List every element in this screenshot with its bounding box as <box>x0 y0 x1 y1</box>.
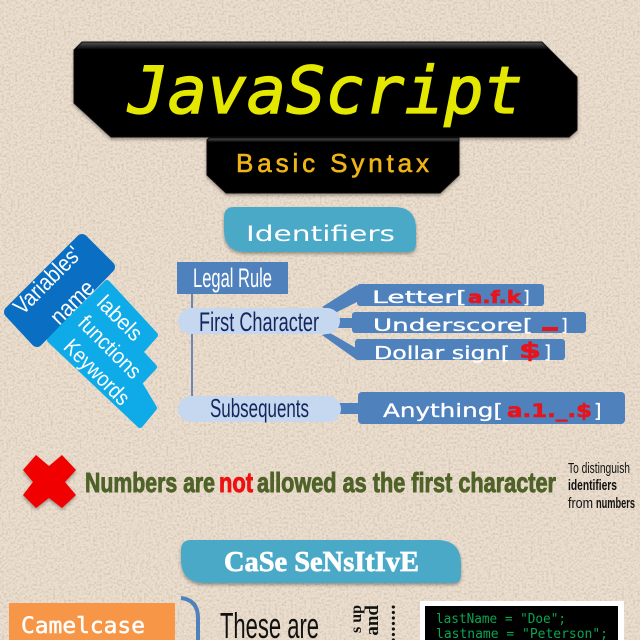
rule: Letter: Letter[ <box>372 288 467 308</box>
rotated text fragments: and <box>362 605 383 636</box>
rule: Letter: ] <box>523 288 530 308</box>
ribbon: Variables' name <box>8 240 109 341</box>
rule: Anything: ] <box>594 400 601 422</box>
code box <box>420 601 624 640</box>
heading: Identifiers: Identifiers <box>246 222 395 246</box>
ribbon: labels, functions, Keywords <box>50 283 155 425</box>
box: Legal Rule <box>177 262 288 294</box>
box: Legal Rule: Legal Rule <box>193 263 272 293</box>
subtitle banner: Basic Syntax <box>207 138 459 193</box>
label: labels: labels <box>92 290 148 346</box>
warning text: numbers not allowed <box>85 467 556 498</box>
connector from Subsequents <box>338 403 359 414</box>
rule: Underscore: Underscore[ <box>373 316 533 336</box>
warning text: numbers not allowed: Numbers are <box>85 467 215 498</box>
side note: to distinguish identifiers from numbers: identifiers <box>568 477 617 494</box>
warning text: numbers not allowed: allowed as the first character <box>257 467 556 498</box>
label: Keywords: Keywords <box>59 334 135 410</box>
code line 1: lastName = "Doe"; <box>436 612 566 627</box>
side note: to distinguish identifiers from numbers: from <box>568 495 593 512</box>
title banner: JavaScript <box>74 42 577 137</box>
subtitle banner: Basic Syntax: Basic Syntax <box>236 148 429 178</box>
tree connector line <box>191 294 193 396</box>
rule: Letter <box>357 284 544 308</box>
rule: Dollar sign: Dollar sign[ <box>374 343 510 364</box>
title banner: JavaScript: JavaScript <box>127 54 523 129</box>
rule: Underscore <box>352 312 586 336</box>
rule: Dollar sign: ] <box>544 342 551 363</box>
box: Camelcase: Camelcase <box>21 614 145 639</box>
heading: Case Sensitive <box>181 540 461 583</box>
rotated text fragments <box>348 604 400 640</box>
rule: Dollar sign: $ <box>519 339 541 363</box>
label: functions: functions <box>73 310 147 384</box>
label: Variables': Variables' <box>8 241 86 319</box>
bracket <box>181 598 198 640</box>
icon: red cross <box>23 455 76 508</box>
rotated text fragments: s up <box>348 605 365 633</box>
heading: Identifiers <box>224 207 416 252</box>
rule: Underscore: ] <box>561 316 568 336</box>
side note: to distinguish identifiers from numbers <box>568 460 635 512</box>
pill: Subsequents: Subsequents <box>210 393 309 423</box>
pill: First Character: First Character <box>199 307 319 337</box>
rule: Letter: a.f.k <box>468 288 522 308</box>
label: name: name <box>44 274 100 330</box>
box: Camelcase <box>9 603 175 640</box>
heading: Case Sensitive: CaSe SeNsItIvE <box>224 547 419 578</box>
rule: Anything: Anything[ <box>383 400 503 422</box>
connectors from First Character <box>322 285 357 360</box>
rule: Anything: a.1._.$ <box>507 400 592 422</box>
warning text: numbers not allowed: not <box>219 467 253 498</box>
rule: Anything <box>358 392 625 424</box>
rule: Dollar sign <box>355 339 565 364</box>
